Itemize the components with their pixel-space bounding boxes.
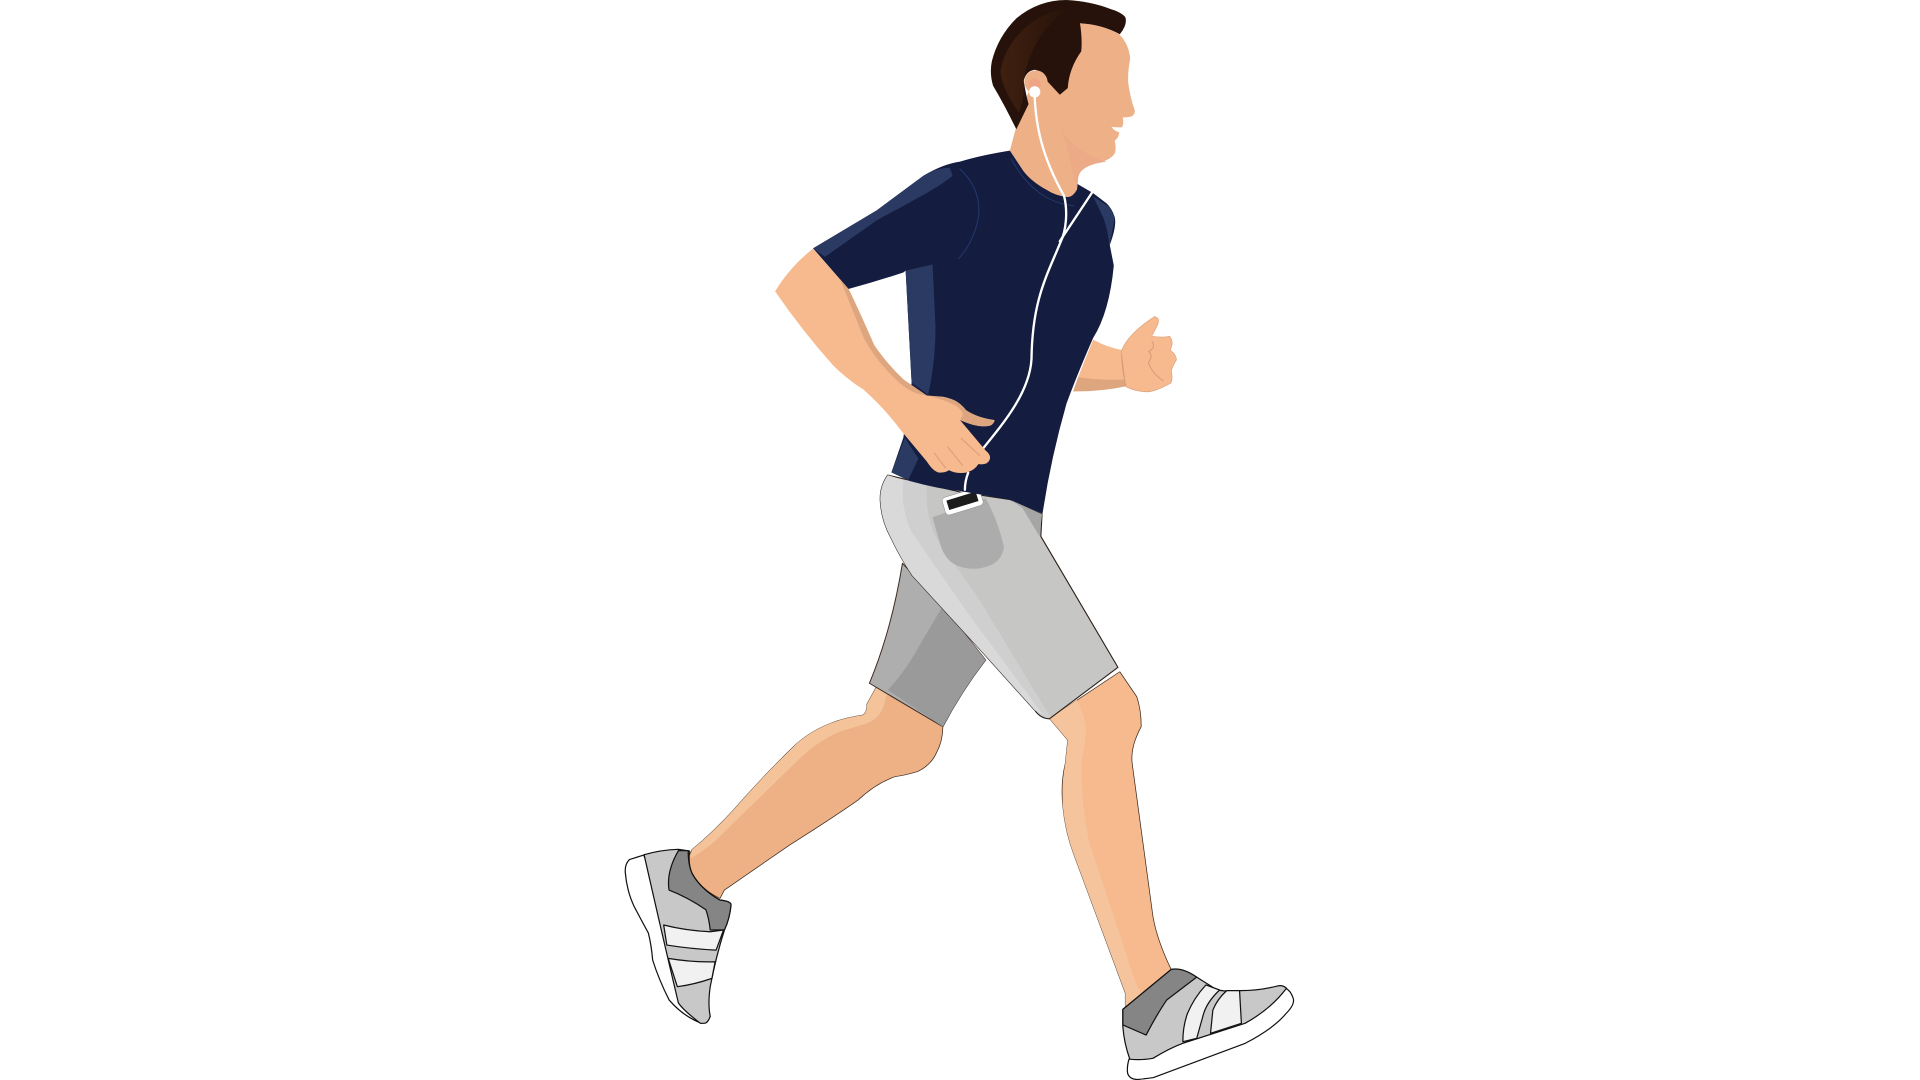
upper — [644, 849, 731, 1023]
back leg — [688, 687, 943, 898]
inner ear — [1029, 78, 1041, 91]
right fist — [1122, 317, 1176, 392]
white band bottom — [668, 958, 715, 987]
hair — [991, 0, 1126, 129]
sleeve seam — [959, 169, 979, 258]
heel patch — [1123, 969, 1197, 1035]
sleeve highlight — [813, 168, 953, 257]
jaw shade — [1058, 121, 1106, 190]
white stripe one — [1183, 985, 1220, 1042]
earphone wire — [965, 97, 1093, 490]
thumb shade — [927, 396, 994, 426]
shorts mid highlight — [903, 480, 1051, 718]
hair highlight — [1000, 9, 1068, 113]
ear — [1024, 70, 1048, 94]
head and neck — [991, 0, 1135, 197]
arm shade — [840, 279, 927, 396]
white band top — [664, 925, 724, 950]
shorts highlight — [880, 475, 1044, 716]
front shorts — [880, 475, 1118, 719]
pocket — [933, 498, 1004, 569]
sole — [1127, 988, 1294, 1079]
back leg shorts — [869, 563, 986, 727]
lower side panel — [891, 438, 918, 480]
front leg — [1049, 672, 1171, 1009]
sole — [625, 855, 710, 1023]
right arm behind the body — [1073, 340, 1127, 391]
fist finger lines — [1122, 342, 1163, 386]
shirt — [813, 151, 1115, 514]
heel patch — [668, 851, 731, 930]
right shoe — [1123, 969, 1294, 1079]
side panel — [906, 264, 936, 395]
phone — [941, 487, 984, 516]
finger lines — [934, 438, 980, 468]
white stripe two — [1211, 991, 1241, 1033]
left arm and hand — [775, 249, 994, 473]
left shoe — [625, 849, 731, 1023]
upper — [1123, 969, 1287, 1060]
earbud — [1029, 86, 1040, 97]
collar seam — [1011, 159, 1074, 206]
shoulder highlight — [1093, 197, 1115, 246]
waistband shade — [1010, 500, 1042, 536]
